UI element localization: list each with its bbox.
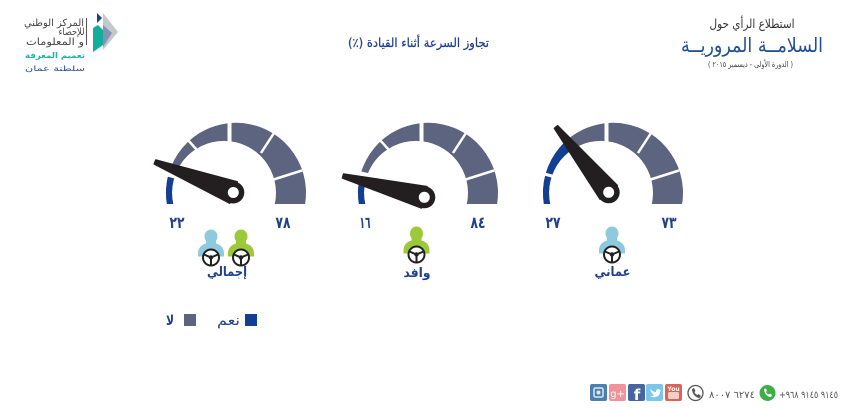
gauge needle [554,126,620,203]
legend label no: لا [166,313,174,329]
footer contact bar [590,384,838,404]
icon: google plus: g+ [610,389,625,400]
icon: youtube: You [666,386,680,393]
legend swatch no [184,314,196,326]
value: no share: ٨٤ [470,213,486,232]
chart title: تجاوز السرعة أثناء القيادة (٪) [348,34,489,51]
gauge arc segments [352,118,498,204]
logo country: سلطنة عمان [25,64,85,73]
label: total: إجمالي [207,265,247,280]
driver green [228,230,254,266]
gauge arc segments [537,118,683,204]
heading main title: السلامــة المروريــة [681,33,823,57]
legend label yes: نعم [217,313,240,329]
icon: facebook: f [634,386,641,404]
icon: youtube [665,384,682,401]
gauge: expatriate [342,118,498,232]
gauge: omani [543,122,683,228]
value: yes share: ١٦ [360,213,371,232]
legend [166,313,257,329]
logo [24,13,118,73]
logo divider [86,18,87,45]
gauge arc segments [160,118,306,204]
icon: instagram [590,384,607,401]
icon: phone [688,386,703,400]
driver blue [198,230,224,266]
gauge needle [154,160,244,204]
label: omani: عماني [594,265,630,280]
logo mark [93,13,118,52]
logo organisation name: المركز الوطني [24,18,84,29]
logo name line three: و المعلومات [26,37,84,48]
heading line one: استطلاع الرأي حول [710,15,794,32]
icon: facebook [628,384,645,404]
icon: twitter [646,384,663,401]
report heading [681,15,823,69]
logo name line two: للإحصاء [58,27,84,38]
heading date: ( الدورة الأولى - ديسمبر ٢٠١٥ ) [708,59,793,69]
icon: expatriate driver [404,226,430,262]
legend swatch yes [245,314,257,326]
icon: total drivers [198,230,254,266]
label: expatriate: وافد [404,266,430,281]
gauge needle [342,174,435,208]
value: no share: ٧٨ [276,213,291,232]
whatsapp number: ‎+٩٦٨‎ ‎٩١٤٥‎ ‎٩١٤٥ [779,390,838,401]
icon: whatsapp [760,385,776,401]
phone number: ٨٠٠٧‎ ‎٦٢٧٤ [709,390,755,401]
icon: omani driver [599,226,625,262]
value: no share: ٧٣ [662,213,677,232]
gauge: total [154,118,306,232]
logo tagline: تعميم المعرفة [25,51,85,60]
value: yes share: ٢٧ [546,213,561,232]
value: yes share: ٢٢ [170,213,185,232]
icon: google plus [609,384,626,401]
